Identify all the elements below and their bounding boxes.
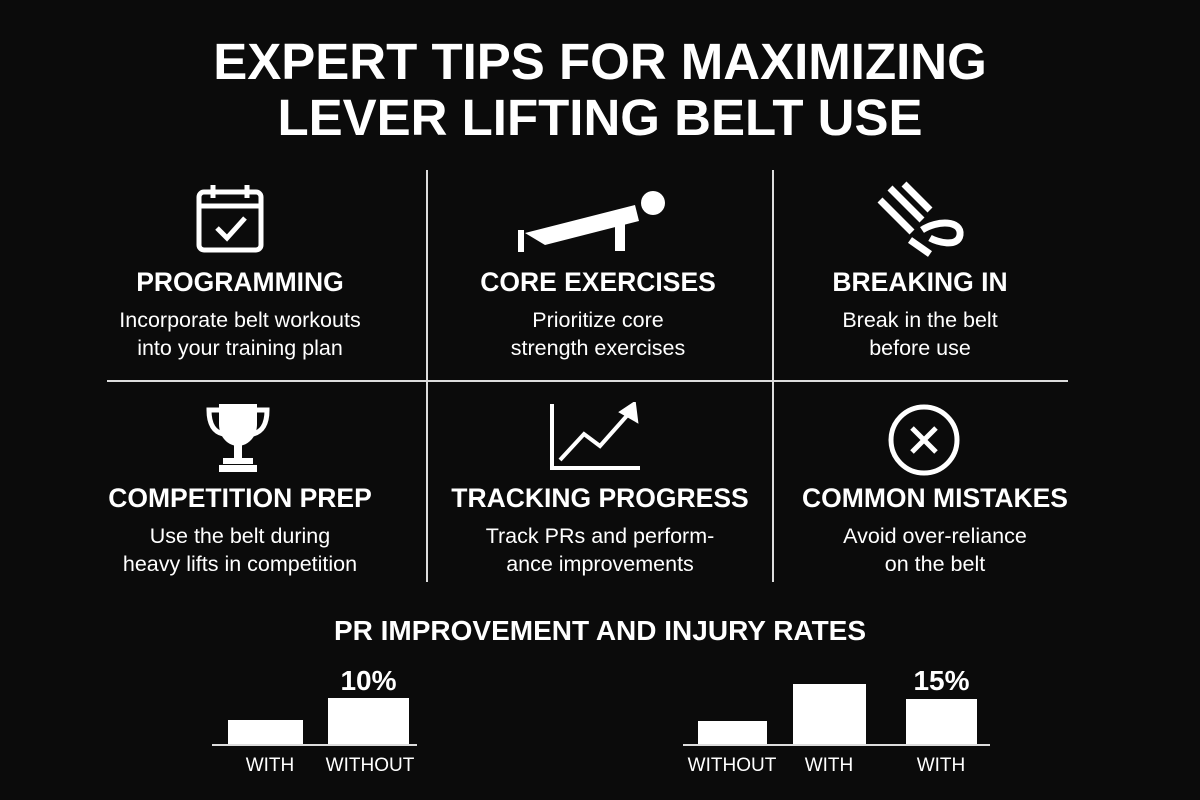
panel: programming: into your training plan: [137, 336, 343, 360]
bar chart: right: WITH: [805, 755, 853, 776]
panel: programming: PROGRAMMING: [136, 267, 344, 297]
panel: tracking progress: Track PRs and perform-: [486, 524, 714, 548]
bar chart: right: [683, 665, 990, 776]
icon: pushup: [518, 191, 665, 252]
panel: programming: [119, 267, 361, 360]
panel: core exercises: Prioritize core: [532, 308, 664, 332]
icon: x circle: [888, 404, 960, 476]
panel: breaking in: Break in the belt: [842, 308, 998, 332]
panel: common mistakes: COMMON MISTAKES: [802, 483, 1068, 513]
title: [213, 33, 987, 146]
panel: breaking in: [832, 267, 1008, 360]
panel: core exercises: [480, 267, 716, 360]
panel: programming: Incorporate belt workouts: [119, 308, 361, 332]
panel: common mistakes: [802, 483, 1068, 576]
bar chart: right: WITHOUT: [688, 755, 776, 776]
chart title: PR IMPROVEMENT AND INJURY RATES: [334, 615, 866, 646]
title: LEVER LIFTING BELT USE: [277, 89, 923, 146]
panel: common mistakes: Avoid over-reliance: [843, 524, 1027, 548]
icon: chart: [550, 402, 640, 470]
bar chart: left: WITHOUT: [326, 755, 414, 776]
panel: competition prep: heavy lifts in competition: [123, 552, 357, 576]
bar chart: left: [212, 665, 417, 776]
panel: competition prep: COMPETITION PREP: [108, 483, 372, 513]
panel: core exercises: CORE EXERCISES: [480, 267, 716, 297]
bar chart: right: WITH: [917, 755, 965, 776]
bar chart: left: WITH: [246, 755, 294, 776]
panel: breaking in: BREAKING IN: [832, 267, 1008, 297]
icon: trophy: [206, 404, 270, 472]
title: EXPERT TIPS FOR MAXIMIZING: [213, 33, 987, 90]
bar chart: left: 10%: [340, 665, 397, 696]
panel: common mistakes: on the belt: [885, 552, 985, 576]
panel: tracking progress: TRACKING PROGRESS: [451, 483, 749, 513]
panel: competition prep: [108, 483, 372, 576]
icon: calendar: [196, 185, 264, 252]
bar chart: right: 15%: [913, 665, 970, 696]
panel: breaking in: before use: [869, 336, 971, 360]
panel: tracking progress: [451, 483, 749, 576]
icon: hand belt: [878, 182, 964, 257]
panel: core exercises: strength exercises: [511, 336, 685, 360]
panel: tracking progress: ance improvements: [506, 552, 694, 576]
panel: competition prep: Use the belt during: [150, 524, 330, 548]
